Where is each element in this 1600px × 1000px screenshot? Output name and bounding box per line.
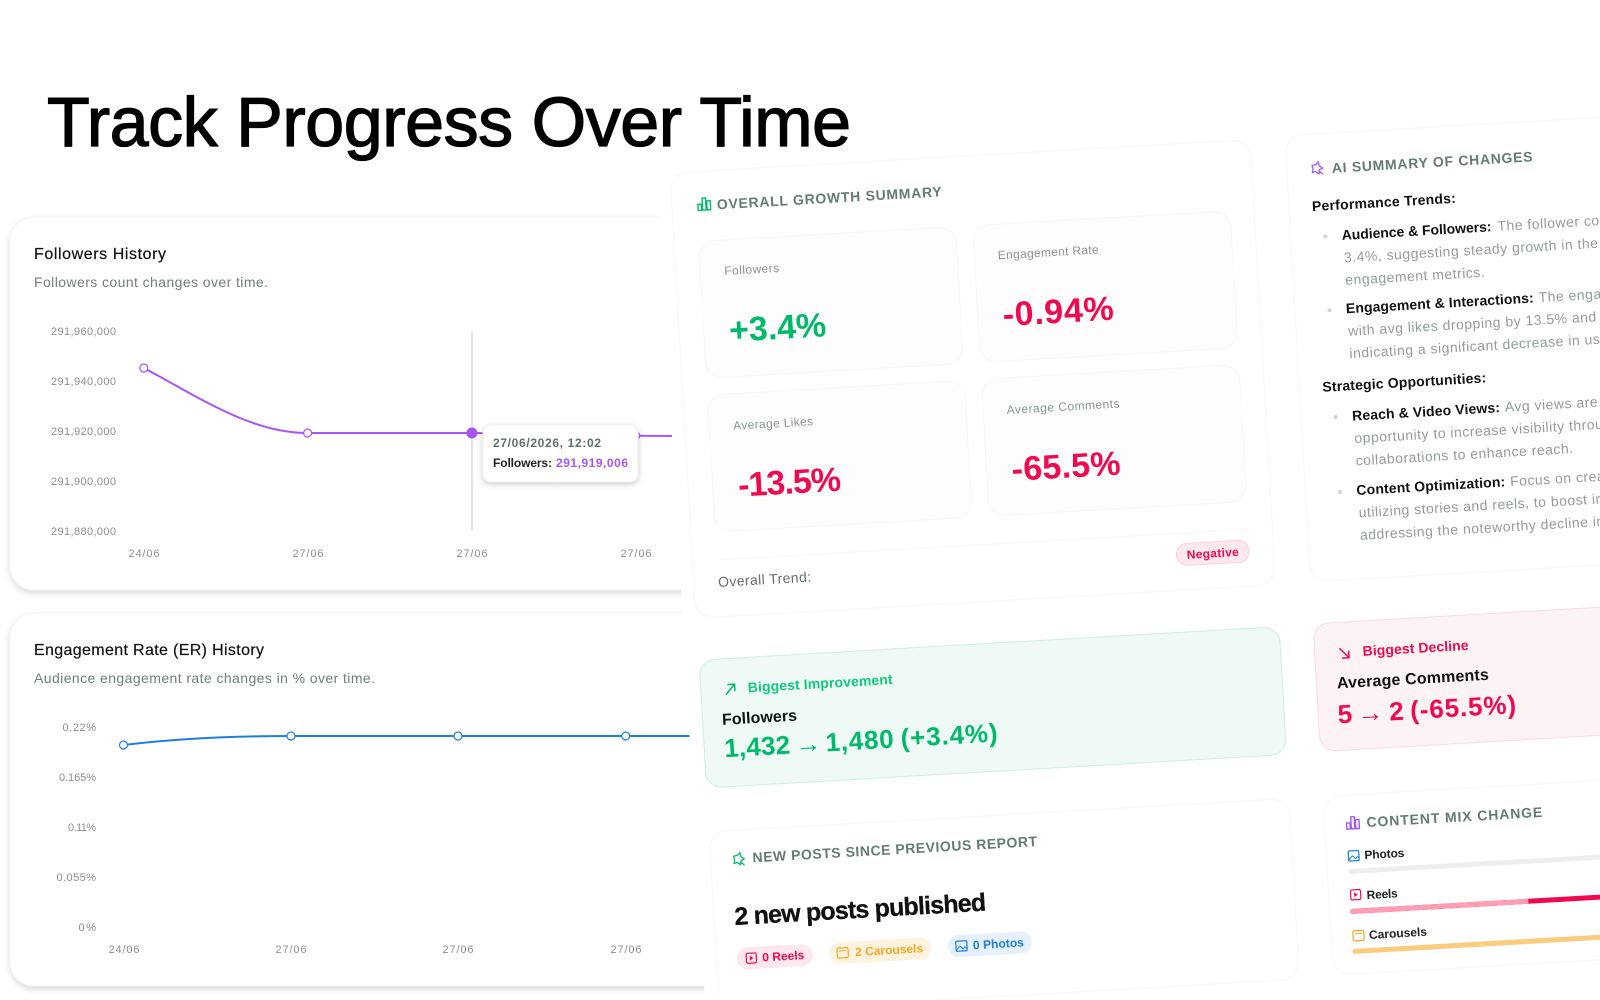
y axis: followers: 291,960,000 (51, 326, 116, 338)
crosshair line (471, 331, 473, 531)
label: overall trend: Overall Trend: (718, 569, 811, 590)
panel: new posts (709, 798, 1299, 1000)
x axis: followers: 24/06 (128, 548, 160, 560)
panel: biggest improvement: Followers (722, 708, 798, 729)
icon: arrow down right (1339, 648, 1349, 658)
x axis: engagement rate (108, 944, 642, 956)
badge: negative (1176, 540, 1250, 566)
badge: reels: 0 Reels (762, 948, 805, 964)
panel: new posts: 2 new posts published (734, 889, 987, 931)
panel: ai summary: Strategic Opportunities: (1322, 369, 1487, 395)
tooltip: 291,919,006 (556, 456, 628, 470)
value change: followers: (+3.4%) (900, 718, 998, 753)
bullet: reach and video views (1333, 392, 1600, 470)
panel: new posts: NEW POSTS SINCE PREVIOUS REPORT (752, 833, 1038, 865)
icon: bar chart purple (1346, 816, 1359, 829)
bullet: reach and video views: collaborations to enhance reach. (1355, 440, 1574, 468)
y axis: followers: 291,900,000 (51, 476, 116, 488)
value change: average comments: 5 (1337, 699, 1353, 729)
value change: followers (723, 718, 998, 763)
x axis: engagement rate: 27/06 (276, 944, 306, 956)
x axis: followers (128, 548, 652, 560)
value change: followers: → (794, 728, 822, 759)
panel: biggest decline: Average Comments (1337, 667, 1489, 692)
panel: engagement rate history (10, 613, 790, 986)
stat card: engagement rate: Engagement Rate (997, 242, 1099, 262)
panel: overall growth summary (670, 140, 1276, 618)
panel: followers history (10, 217, 770, 590)
tilted dashboard (670, 115, 1600, 1000)
stat card: average likes: -13.5% (737, 461, 842, 505)
bullet: content optimization (1337, 464, 1600, 544)
bullet: reach and video views: Reach & Video Views: (1352, 399, 1500, 424)
stat card: average comments (981, 365, 1247, 516)
y axis: engagement rate: 0.22% (62, 722, 96, 734)
y axis: engagement rate (56, 722, 96, 934)
y axis: engagement rate: 0.055% (56, 872, 96, 884)
icon: sparkle purple (1312, 162, 1323, 175)
y axis: followers (51, 326, 116, 538)
value change: average comments (1337, 689, 1517, 729)
icon: arrow up right (726, 684, 735, 695)
x axis: followers: 27/06 (456, 548, 488, 560)
bullet: audience and followers: 3.4%, suggesting steady growth in the (1344, 235, 1599, 265)
tooltip: Followers: (493, 456, 552, 470)
tilted backing sheet (646, 0, 1600, 1000)
y axis: followers: 291,880,000 (51, 526, 116, 538)
stat card: followers (698, 227, 963, 378)
stat card: average likes: Average Likes (733, 414, 813, 433)
bullet: audience and followers: Audience & Followers: (1341, 218, 1492, 243)
bullet: content optimization: addressing the noteworthy decline in (1360, 513, 1600, 543)
bullet: audience and followers (1323, 211, 1600, 289)
x axis: engagement rate: 27/06 (442, 944, 474, 956)
badge: carousels: 2 Carousels (855, 941, 924, 959)
row: reels: Reels (1366, 886, 1398, 902)
value change: average comments: (-65.5%) (1409, 689, 1517, 725)
panel: content mix change: CONTENT MIX CHANGE (1366, 804, 1543, 830)
value change: followers: 1,480 (825, 724, 894, 757)
row: carousels (1351, 912, 1600, 954)
subtitle: engagement rate: Audience engagement rate changes in % over time. (34, 670, 375, 686)
x axis: engagement rate: 27/06 (610, 944, 642, 956)
value change: followers: 1,432 (723, 730, 791, 763)
line chart: engagement rate (120, 732, 700, 749)
heading: engagement rate history: Engagement Rate (ER) History (34, 642, 264, 659)
stat card: average comments: Average Comments (1006, 397, 1120, 417)
row: photos: Photos (1364, 846, 1405, 862)
stat card: average likes (707, 380, 972, 532)
y axis: followers: 291,940,000 (51, 376, 116, 388)
tooltip: 27/06/2026, 12:02 (493, 436, 601, 450)
tooltip (483, 425, 638, 482)
x axis: followers: 27/06 (292, 548, 324, 560)
panel: biggest decline: Biggest Decline (1362, 637, 1469, 659)
badge: negative: Negative (1186, 545, 1239, 562)
panel: content mix change (1323, 777, 1600, 975)
x axis: followers: 27/06 (620, 548, 652, 560)
y axis: engagement rate: 0% (78, 922, 96, 934)
heading: overall growth summary: OVERALL GROWTH SUMMARY (716, 183, 943, 212)
badge: photos (947, 931, 1032, 958)
row: carousels: Carousels (1369, 925, 1428, 942)
icon: sparkle green (733, 852, 745, 866)
heading: followers history: Followers History (34, 246, 166, 263)
badge: photos: 0 Photos (973, 935, 1025, 952)
bullet: engagement and interactions: Engagement & Interactions: (1345, 290, 1534, 316)
bullet: content optimization: Content Optimization: (1356, 473, 1506, 498)
stat card: engagement rate (973, 211, 1238, 362)
stat card: followers: Followers (724, 261, 780, 278)
panel: ai summary (1285, 115, 1600, 582)
bullet: audience and followers: engagement metrics. (1345, 264, 1486, 288)
value change: average comments: → (1356, 697, 1384, 728)
title: Track Progress Over Time (47, 83, 851, 161)
panel: biggest improvement (699, 627, 1286, 788)
panel: biggest improvement: Biggest Improvement (747, 671, 893, 695)
line chart: followers (140, 364, 680, 440)
panel: ai summary: Performance Trends: (1312, 190, 1456, 214)
value change: average comments: 2 (1388, 696, 1404, 726)
panel: biggest decline (1313, 604, 1600, 752)
icon: bar chart green (698, 198, 711, 210)
bullet: engagement and interactions (1327, 283, 1600, 362)
stat card: followers: +3.4% (728, 306, 827, 350)
row: photos (1347, 832, 1600, 874)
row: reels (1349, 872, 1600, 914)
subtitle: followers: Followers count changes over time. (34, 274, 268, 290)
badge: carousels (829, 937, 932, 965)
badge: reels (736, 944, 813, 970)
panel: ai summary: AI SUMMARY OF CHANGES (1331, 148, 1533, 176)
stat card: average comments: -65.5% (1011, 445, 1122, 489)
stat card: engagement rate: -0.94% (1002, 290, 1115, 334)
y axis: followers: 291,920,000 (51, 426, 116, 438)
y axis: engagement rate: 0.165% (59, 772, 96, 784)
x axis: engagement rate: 24/06 (108, 944, 140, 956)
y axis: engagement rate: 0.11% (68, 822, 96, 834)
